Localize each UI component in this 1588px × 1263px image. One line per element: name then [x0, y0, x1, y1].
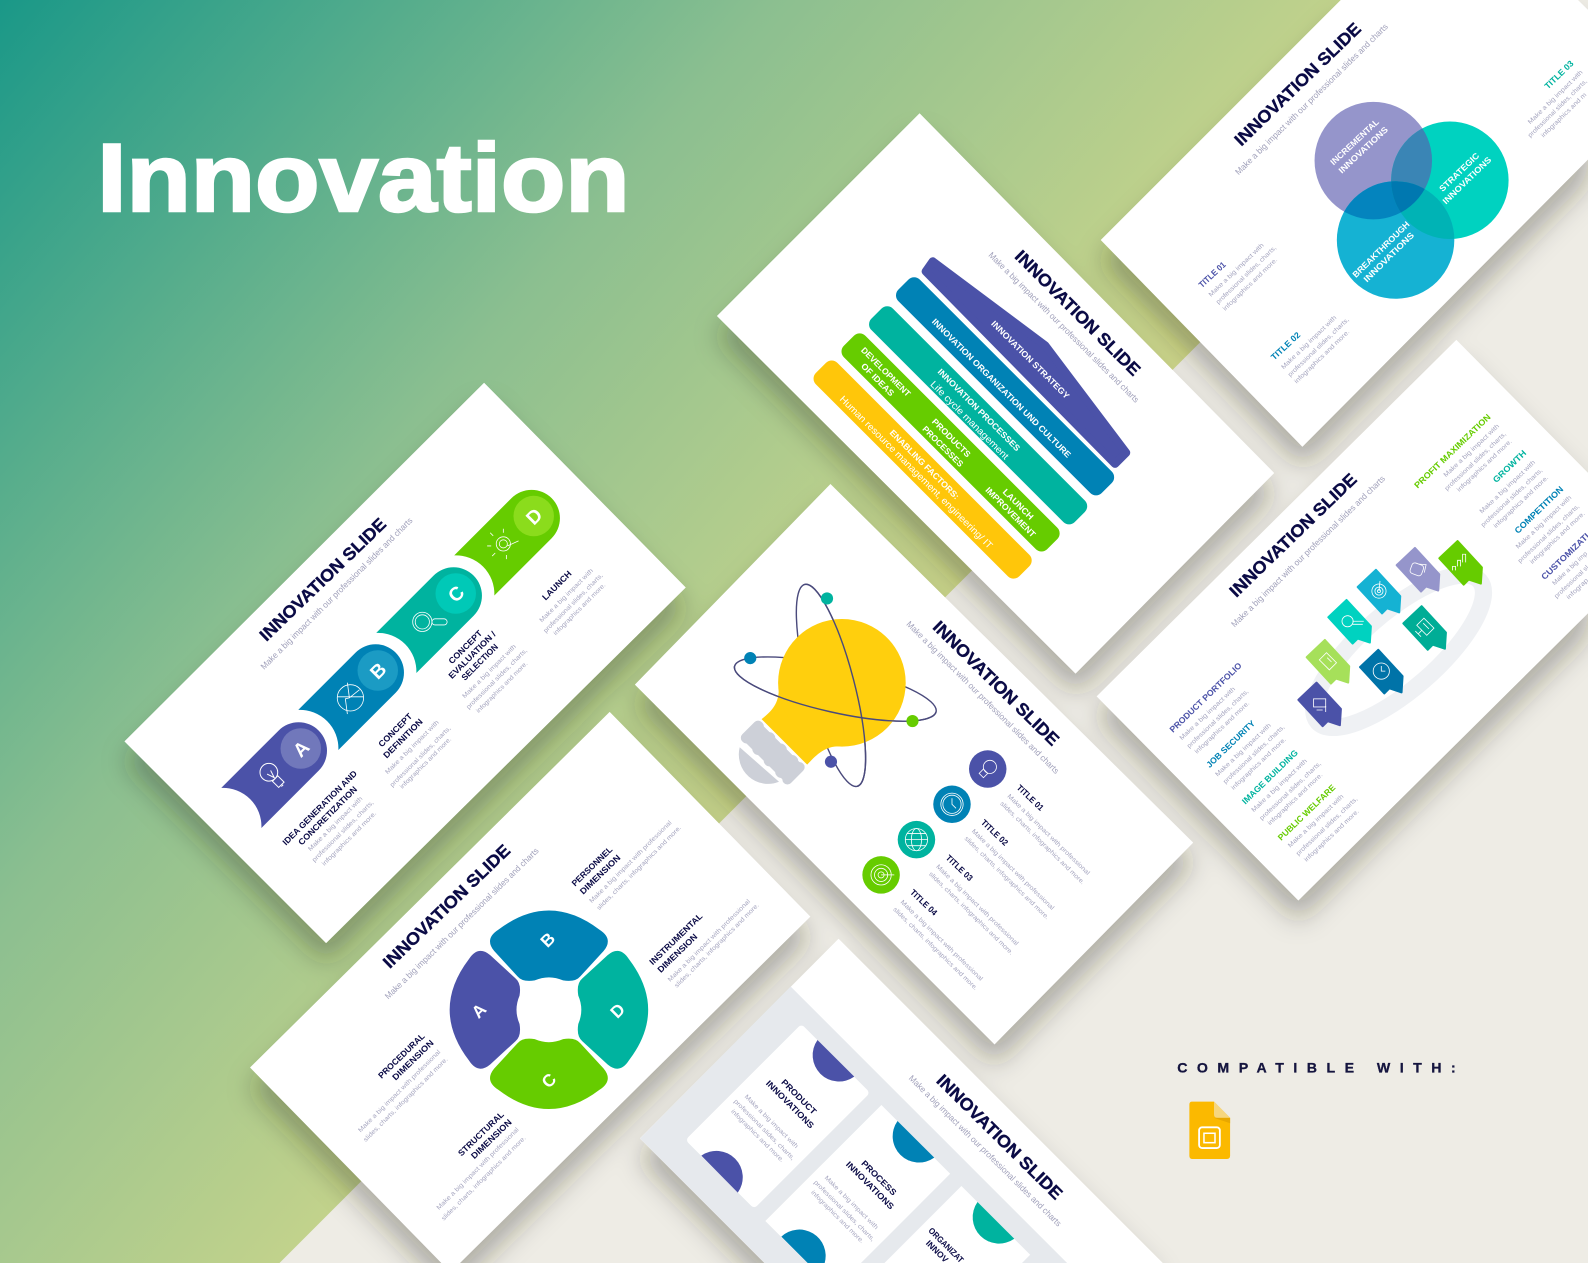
list: customization: infograp	[1565, 577, 1588, 601]
gray card tray	[640, 986, 1067, 1263]
text block: title 01: TITLE 01	[1015, 783, 1046, 813]
slide heading: INNOVATION SLIDE	[933, 1070, 1067, 1203]
slide heading: INNOVATION SLIDE	[255, 514, 390, 645]
panel: four-step pill slide	[125, 383, 686, 943]
list: profit maximization: Make a big impact with	[1442, 423, 1501, 479]
label: instrumental dimension: DIMENSION	[655, 932, 699, 975]
venn diagram: INCREMENTAL	[1328, 117, 1381, 167]
label: concept definition: Make a big impact with	[384, 719, 441, 776]
text block: title 02: infographics and more.	[1293, 329, 1351, 385]
text block: title 01: Make a big impact with	[1208, 242, 1266, 298]
label: instrumental dimension: Make a big impact with professional	[667, 898, 752, 983]
label: instrumental dimension: slides, charts, infographics and more.	[673, 902, 761, 989]
label: procedural dimension	[357, 1031, 450, 1144]
text block: title 02: TITLE 02	[979, 817, 1010, 848]
label: personnel dimension: Make a big impact with professional	[588, 820, 673, 905]
text block: title 01: professional slides, charts,	[1215, 244, 1278, 306]
slide heading: INNOVATION SLIDE	[1011, 246, 1145, 380]
label: personnel dimension	[570, 820, 683, 912]
panel: innovation types slide	[640, 939, 1163, 1263]
list: profit maximization: PROFIT MAXIMIZATION	[1412, 412, 1493, 490]
text block: title 01	[998, 783, 1091, 886]
list: product portfolio: PRODUCT PORTFOLIO	[1167, 660, 1244, 734]
list: customization: Make a big imp	[1551, 550, 1588, 587]
label: launch	[538, 567, 607, 637]
label: concept definition: professional slides, charts,	[389, 725, 453, 789]
label: idea generation: IDEA GENERATION AND	[280, 768, 359, 847]
label: launch: infographics and more.	[552, 582, 607, 637]
stack labels: OF IDEAS	[859, 361, 896, 398]
slide subtitle: Make a big impact with our professional slides and charts	[383, 846, 541, 1001]
pill C: C	[445, 582, 469, 607]
list: product portfolio: Make a big impact with	[1178, 685, 1237, 742]
venn diagram: BREAKTHROUGH	[1350, 219, 1412, 280]
label: instrumental dimension: INSTRUMENTAL	[647, 911, 704, 967]
pill C	[376, 556, 494, 673]
stack labels: Human resource management, engineering/ IT	[837, 394, 995, 551]
panel: four petal slide	[250, 712, 810, 1263]
text block: title 04: TITLE 04	[908, 887, 940, 918]
panel: ring with callouts slide	[1097, 340, 1588, 900]
list: image building: Make a big impact with	[1250, 757, 1309, 814]
text block: title 02: TITLE 02	[1269, 330, 1302, 362]
label: structural dimension: slides, charts, infographics and more.	[440, 1135, 528, 1222]
text block: title 01: TITLE 01	[1197, 259, 1228, 290]
list: public welfare: professional slides, charts,	[1295, 796, 1359, 857]
pill B	[298, 633, 416, 750]
panel: light bulb slide	[635, 484, 1193, 1044]
stack labels: INNOVATION PROCESSES	[936, 367, 1022, 453]
label: concept evaluation: professional slides, charts,	[465, 647, 529, 711]
card: product innovations: infographics and more.	[729, 1108, 785, 1164]
callout: dark teal	[1403, 606, 1446, 650]
label: structural dimension: Make a big impact with professional	[435, 1126, 521, 1212]
text block: title 03: Make a big impact with professional	[934, 863, 1020, 947]
card: product innovations: professional slides, charts,	[732, 1098, 796, 1162]
list: profit maximization: infographics and more.	[1456, 438, 1514, 493]
list: public welfare	[1276, 782, 1361, 863]
stack labels: DEVELOPMENT	[859, 345, 913, 399]
ring	[1292, 552, 1505, 751]
pill D: D	[523, 505, 547, 529]
slide subtitle: Make a big impact with our professional slides and charts	[905, 619, 1061, 776]
band: enabling factors	[810, 357, 1035, 582]
text block: title 03: Make a big impact with	[1527, 69, 1585, 126]
list: competition: professional slides, charts,	[1517, 503, 1581, 565]
callout: light green	[1307, 640, 1349, 684]
icon: clock badge	[933, 786, 971, 823]
icon: target badge	[862, 856, 900, 894]
slide subtitle: Make a big impact with our professional slides and charts	[907, 1073, 1064, 1228]
list: job security	[1204, 718, 1288, 792]
pill B: B	[367, 659, 391, 684]
stack labels: Life cycle management	[928, 379, 1011, 462]
slide heading: INNOVATION SLIDE	[1230, 19, 1365, 150]
card: product innovations: Make a big impact with	[743, 1094, 800, 1150]
label: idea generation: infographics and more.	[321, 810, 378, 867]
card: process innovations: infographics and more.	[809, 1189, 865, 1245]
label: idea generation: Make a big impact with	[307, 795, 365, 853]
list: competition: COMPETITION	[1512, 484, 1565, 536]
pill A	[221, 711, 339, 828]
petal A: A	[467, 999, 490, 1022]
list: product portfolio	[1167, 660, 1251, 755]
label: structural dimension	[435, 1109, 528, 1222]
card: process innovations: Make a big impact with	[823, 1175, 880, 1231]
label: procedural dimension: Make a big impact with professional	[357, 1049, 442, 1134]
list: image building: professional slides, charts,	[1258, 760, 1323, 822]
list: public welfare: Make a big impact with	[1287, 793, 1346, 849]
text block: title 01: Make a big impact with professional	[1006, 793, 1091, 877]
label: concept definition: infographics and more.	[399, 736, 453, 790]
panel: venn slide	[1101, 0, 1588, 447]
card: product innovations: PRODUCT	[779, 1077, 819, 1117]
list: competition	[1512, 484, 1587, 566]
slide subtitle: Make a big impact with our professional slides and charts	[1229, 473, 1387, 629]
icon: google slides file	[1189, 1102, 1230, 1159]
label: structural dimension: DIMENSION	[469, 1117, 514, 1161]
stack labels: LAUNCH	[1001, 487, 1036, 522]
callout: lavender	[1397, 548, 1439, 591]
icon: bulb badge	[969, 750, 1006, 788]
label: concept evaluation: Make a big impact with	[461, 643, 518, 700]
pill A: A	[290, 737, 314, 762]
list: growth	[1478, 448, 1550, 530]
stack labels	[837, 317, 1073, 551]
petal C: C	[537, 1069, 560, 1092]
text block: title 03	[1527, 58, 1588, 139]
card: process innovations: INNOVATIONS	[844, 1159, 896, 1212]
list: competition: Make a big impact with	[1515, 494, 1574, 550]
petal C	[490, 1039, 608, 1109]
list: job security: professional slides, charts,	[1222, 724, 1287, 785]
card: product innovations	[685, 1024, 870, 1209]
pill D	[454, 478, 572, 596]
list: customization: CUSTOMIZATI	[1539, 531, 1588, 582]
slide subtitle: Make a big impact with our professional slides and charts	[1233, 21, 1390, 177]
list: public welfare: PUBLIC WELFARE	[1276, 782, 1338, 842]
list: customization: professional sl	[1553, 564, 1588, 600]
list: growth: infographics and more.	[1492, 474, 1550, 530]
card: process innovations: professional slides, charts,	[812, 1179, 876, 1243]
band: processes	[866, 303, 1091, 528]
card: process innovations: PROCESS	[859, 1158, 899, 1198]
label: procedural dimension: DIMENSION	[390, 1038, 436, 1082]
icon: compass sketch	[337, 683, 364, 714]
card: process innovations	[765, 1105, 950, 1263]
stack labels: IMPROVEMENT	[983, 485, 1038, 540]
slide heading: INNOVATION SLIDE	[929, 617, 1063, 750]
label: personnel dimension: DIMENSION	[578, 853, 622, 896]
callout: dark blue	[1360, 650, 1403, 693]
label: idea generation: professional slides, charts,	[311, 799, 376, 864]
venn diagram: INNOVATIONS	[1361, 230, 1416, 284]
icon: light bulb	[256, 760, 289, 792]
callout: green	[1439, 541, 1482, 585]
list: image building: IMAGE BUILDING	[1240, 747, 1300, 806]
petal A	[450, 951, 520, 1069]
text block: title 04: Make a big impact with professional	[899, 899, 984, 983]
text block: title 01: slides, charts, infographics and more.	[998, 800, 1086, 886]
label: idea generation	[280, 768, 378, 867]
compatible with label: COMPATIBLE WITH:	[1177, 1060, 1456, 1076]
list: public welfare: infographics and more.	[1303, 808, 1361, 863]
band: organization	[893, 274, 1117, 499]
label: concept evaluation: infographics and more.	[475, 660, 530, 715]
label: launch: Make a big impact with	[538, 567, 595, 624]
label: procedural dimension: PROCEDURAL	[376, 1031, 427, 1080]
list: profit maximization	[1412, 412, 1514, 493]
slide subtitle: Make a big impact with our professional slides and charts	[258, 515, 414, 671]
list: job security: infographics and more.	[1230, 736, 1288, 792]
illustration: bulb with orbits	[729, 579, 941, 792]
label: concept evaluation: EVALUATION /	[446, 629, 498, 681]
petal B: B	[536, 928, 559, 951]
text block: title 03: TITLE 03	[944, 853, 975, 883]
label: personnel dimension: PERSONNEL	[570, 844, 614, 888]
text block: title 04: slides, charts, infographics and more.	[891, 906, 979, 992]
text block: title 03: infographics and m	[1540, 92, 1588, 139]
text block: title 02: slides, charts, infographics and more.	[963, 835, 1050, 921]
list: job security: JOB SECURITY	[1204, 718, 1257, 770]
text block: title 02: Make a big impact with	[1280, 314, 1339, 371]
venn diagram: INNOVATIONS	[1336, 124, 1390, 175]
icon: touch target	[487, 529, 519, 559]
petal B	[490, 911, 608, 981]
label: concept evaluation: CONCEPT	[446, 628, 485, 666]
callout: purple	[1298, 683, 1341, 726]
petal D: D	[606, 999, 629, 1022]
list: product portfolio: infographics and more.	[1194, 700, 1251, 755]
label: procedural dimension: slides, charts, infographics and more.	[362, 1056, 450, 1144]
text block: title 01: infographics and more.	[1222, 257, 1279, 312]
label: idea generation: CONCRETIZATION	[296, 784, 359, 847]
icon: magnifier	[413, 612, 447, 632]
panel: layered stack slide	[717, 113, 1274, 674]
text block: title 04	[891, 887, 984, 992]
list: job security: Make a big impact with	[1214, 722, 1273, 778]
card: product innovations: INNOVATIONS	[764, 1078, 816, 1131]
list: image building	[1240, 747, 1324, 827]
label: concept definition: CONCEPT	[376, 711, 415, 749]
band: strategy roof	[926, 261, 1126, 464]
stack labels: INNOVATION STRATEGY	[989, 319, 1072, 401]
text block: title 03: professional slides, charts,	[1527, 78, 1588, 139]
label: launch: professional slides, charts,	[542, 572, 605, 634]
petal D	[578, 951, 648, 1069]
list: profit maximization: professional slides, charts,	[1444, 431, 1508, 492]
list: product portfolio: professional slides, charts,	[1186, 688, 1250, 750]
label: launch: LAUNCH	[540, 569, 574, 602]
venn diagram	[1315, 102, 1509, 299]
venn diagram: INNOVATIONS	[1440, 154, 1493, 206]
text block: title 01	[1197, 242, 1279, 312]
text block: title 03: slides, charts, infographics and more.	[927, 871, 1015, 957]
card: organizational innovations	[884, 1186, 1030, 1263]
label: personnel dimension: slides, charts, infographics and more.	[596, 824, 683, 912]
venn diagram: STRATEGIC	[1437, 151, 1481, 194]
label: concept definition	[376, 711, 453, 790]
stack labels: PROCESSES	[920, 424, 966, 469]
text block: title 03	[927, 853, 1020, 957]
label: structural dimension: STRUCTURAL	[456, 1109, 506, 1158]
title: Innovation	[97, 125, 630, 232]
slide subtitle: Make a big impact with our professional slides and charts	[987, 250, 1141, 405]
label: concept definition: DEFINITION	[381, 717, 425, 760]
stack labels: PRODUCTS	[930, 416, 973, 460]
list: customization	[1539, 531, 1588, 601]
icon: globe badge	[898, 821, 935, 858]
list: growth: Make a big impact with	[1478, 459, 1537, 515]
list: growth: professional slides, charts,	[1480, 467, 1544, 529]
list: competition: infographics and more.	[1529, 510, 1587, 566]
callout: light blue	[1358, 570, 1400, 613]
band: development	[838, 330, 1063, 555]
label: instrumental dimension	[647, 898, 761, 989]
stack labels: INNOVATION ORGANIZATION UND CULTURE	[930, 317, 1073, 460]
stack labels: ENABLING FACTORS:	[888, 428, 961, 501]
list: growth: GROWTH	[1491, 448, 1528, 485]
list: image building: infographics and more.	[1267, 772, 1324, 827]
label: concept evaluation	[446, 628, 530, 715]
label: concept evaluation: SELECTION	[459, 642, 500, 682]
callout: teal	[1328, 600, 1371, 644]
text block: title 02	[1269, 314, 1351, 385]
text block: title 03: TITLE 03	[1542, 58, 1576, 91]
slide heading: INNOVATION SLIDE	[1225, 469, 1361, 601]
slide heading: INNOVATION SLIDE	[379, 840, 514, 972]
text block: title 02	[963, 817, 1055, 921]
text block: title 02: professional slides, charts,	[1287, 316, 1351, 378]
text block: title 02: Make a big impact with professional	[970, 828, 1055, 912]
